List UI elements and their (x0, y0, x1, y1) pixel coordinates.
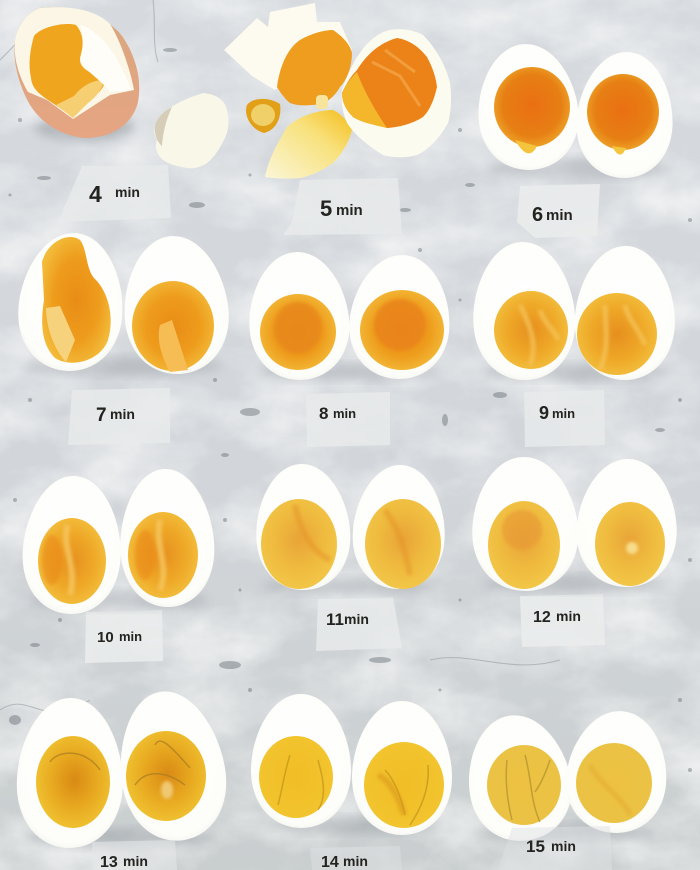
tape labels row 2 (68, 388, 605, 447)
label: 10 min: min (119, 629, 142, 644)
tape labels row 3 (85, 594, 605, 663)
label: 7 min: 7 (96, 405, 107, 426)
label: 12 min: 12 (533, 609, 551, 626)
label: 7 min (68, 388, 170, 445)
label: 12 min: min (556, 608, 581, 624)
label: 5 min (283, 178, 402, 235)
label: 5 min: 5 (320, 196, 332, 221)
label: 15 min (498, 826, 612, 870)
label: 11 min (316, 597, 402, 651)
label: 9 min (524, 390, 605, 447)
eggs: 15 min (459, 706, 673, 848)
eggs: 5 min, broken pieces (224, 3, 451, 179)
wedge (265, 110, 352, 179)
label: 9 min: min (552, 406, 575, 421)
label: 13 min: min (123, 853, 148, 869)
label: 10 min (85, 610, 163, 663)
label: 14 min (310, 846, 402, 870)
label: 6 min: min (546, 207, 573, 224)
label: 15 min: min (551, 838, 576, 854)
eggs: 12 min (470, 455, 679, 593)
shell fragment (154, 93, 229, 168)
label: 11 min: min (344, 611, 369, 627)
eggs: 7 min (14, 230, 233, 377)
eggs: 13 min (16, 684, 235, 849)
egg: 4 min, in its shell (14, 7, 139, 140)
label: 11 min: 11 (326, 610, 344, 629)
eggs: 10 min (21, 467, 216, 616)
label: 14 min: min (343, 853, 368, 869)
label: 4 min: 4 (89, 181, 102, 207)
yolk chunk (277, 30, 352, 105)
label: 13 min (92, 840, 177, 870)
label: 5 min: min (336, 202, 363, 219)
label: 9 min: 9 (539, 403, 549, 423)
label: 4 min: min (115, 184, 140, 200)
eggs: 8 min (246, 249, 454, 383)
label: 12 min (520, 594, 605, 647)
label: 4 min (58, 165, 171, 222)
right half (342, 29, 451, 157)
label: 8 min: min (333, 406, 356, 421)
label: 10 min: 10 (97, 629, 114, 646)
label: 7 min: min (110, 406, 135, 422)
label: 15 min: 15 (526, 837, 545, 856)
label: 8 min (306, 392, 390, 447)
label: 6 min: 6 (532, 204, 543, 226)
tape labels row 1 (58, 165, 600, 238)
label: 6 min (517, 184, 600, 238)
eggs: 11 min (254, 462, 447, 594)
yolk drip (246, 99, 280, 133)
white chunk (224, 3, 352, 90)
eggs: 9 min (471, 240, 676, 382)
eggs: 14 min (251, 694, 452, 835)
label: 8 min: 8 (319, 404, 328, 423)
eggs: 6 min (474, 41, 676, 180)
